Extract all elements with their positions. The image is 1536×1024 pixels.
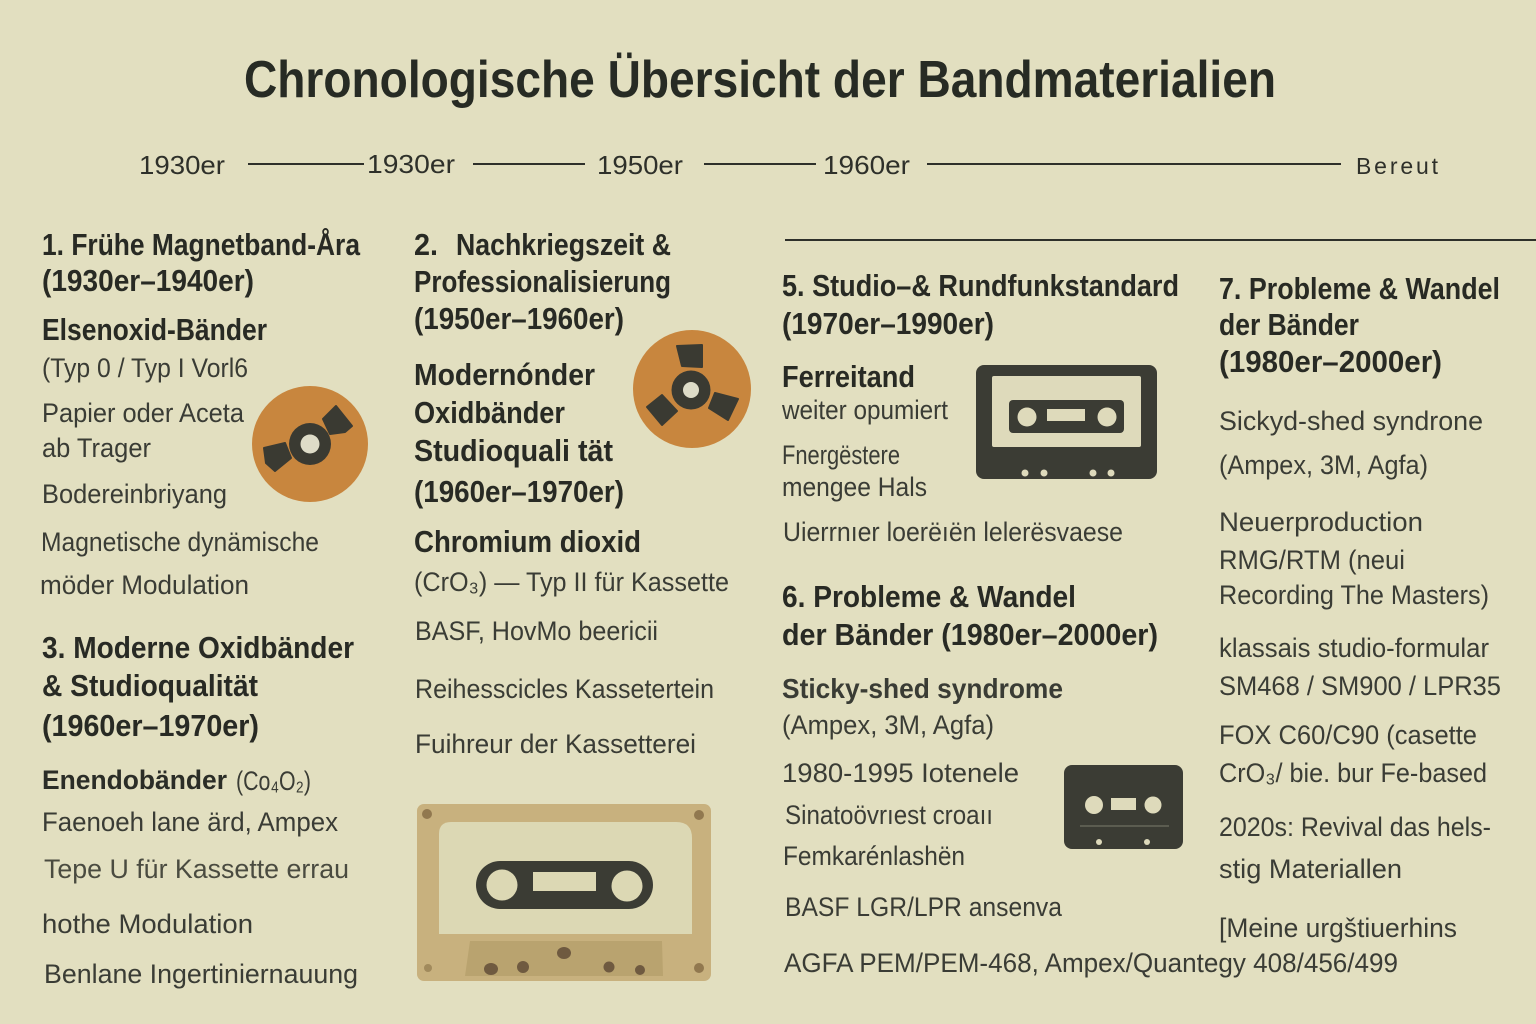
heading: section 3: 3. Moderne Oxidbänder: [42, 630, 354, 665]
panel: section 2 post-war professionalisation: [414, 227, 729, 759]
panel: section 1 early magnetic tape era: [40, 227, 361, 600]
heading: section 1: (1930er–1940er): [42, 263, 254, 298]
text block: section 7 details: stig Materiallen: [1219, 854, 1402, 884]
subheading: modern oxide tapes: Oxidbänder: [414, 395, 565, 430]
text block: section 6 details: BASF LGR/LPR ansenva: [785, 892, 1063, 922]
text block: section 6 details: Sinatoövrıest croaıı: [785, 800, 993, 830]
heading: section 1: [42, 227, 361, 298]
text block: section 2 details: Reihesscicles Kassetertein: [415, 674, 714, 704]
heading: section 1: 1. Frühe Magnetband-Åra: [42, 227, 361, 262]
subheading: iron oxide tapes: Elsenoxid-Bänder: [42, 312, 267, 347]
text block: section 5 details: Uierrnıer loerëıën lelerësvaese: [783, 517, 1123, 547]
text block: section 3 details: Faenoeh lane ärd, Ampex: [42, 807, 338, 837]
panel: section 5 studio and broadcast standard: [781, 268, 1179, 547]
text block: section 7 details: (Ampex, 3M, Agfa): [1219, 450, 1428, 480]
heading: section 7: (1980er–2000er): [1219, 344, 1442, 379]
heading: section 6: der Bänder (1980er–2000er): [782, 617, 1158, 652]
icon: orange tape reel right: [633, 330, 751, 448]
subheading: sticky-shed syndrome: Sticky-shed syndrome: [782, 673, 1063, 704]
heading: section 5: (1970er–1990er): [782, 306, 994, 341]
text block: section 3 details: hothe Modulation: [42, 909, 253, 939]
subheading: chromium dioxide: Chromium dioxid: [414, 524, 641, 559]
text block: section 7 details: RMG/RTM (neui: [1219, 545, 1405, 575]
subheading: modern oxide tapes: [414, 357, 624, 509]
timeline: 1930er: [139, 150, 225, 180]
heading: section 2: Professionalisierung: [414, 264, 671, 299]
text block: section 3 details: Tepe U für Kassette errau: [44, 854, 349, 884]
title: Chronologische Übersicht der Bandmaterialien: [244, 51, 1276, 109]
text block: section 6 details: [782, 710, 1398, 978]
text block: section 1 details: (Typ 0 / Typ I Vorl6: [42, 353, 248, 383]
panel: section 7 problems and change of tapes: [1219, 271, 1501, 943]
icon: beige cassette: [417, 804, 711, 981]
text block: section 3 details: [42, 765, 358, 989]
heading: section 3: & Studioqualität: [42, 668, 258, 703]
text block: section 3 details: Benlane Ingertiniernauung: [44, 959, 358, 989]
heading: section 7: [1219, 271, 1500, 379]
heading: section 6: [782, 579, 1158, 652]
text block: section 1 details: möder Modulation: [40, 570, 249, 600]
text block: section 5 details: mengee Hals: [782, 472, 927, 502]
text block: section 6 details: 1980-1995 Iotenele: [782, 758, 1019, 788]
heading: section 6: 6. Probleme & Wandel: [782, 579, 1076, 614]
heading: section 3: (1960er–1970er): [42, 708, 259, 743]
text block: section 2 details: Fuihreur der Kassetterei: [415, 729, 696, 759]
text block: section 5 details: weiter opumiert: [781, 395, 948, 425]
heading: section 2: 2.: [414, 227, 438, 262]
panel: section 6 problems and change: [782, 579, 1398, 978]
heading: section 5: 5. Studio–& Rundfunkstandard: [782, 268, 1179, 303]
text block: section 1 details: [40, 353, 319, 600]
text block: section 6 details: (Ampex, 3M, Agfa): [782, 710, 994, 740]
timeline: Bereut: [1356, 153, 1439, 179]
timeline: 1950er: [597, 150, 683, 180]
text block: section 7 details: [1219, 406, 1501, 943]
text block: section 5 details: Fnergëstere: [782, 440, 900, 470]
timeline: [139, 149, 1439, 180]
text block: section 5 details: [781, 395, 1123, 547]
text block: section 3 details: (Co₄O₂): [236, 766, 311, 796]
text block: section 1 details: Papier oder Aceta: [42, 398, 245, 428]
text block: section 7 details: [Meine urgštiuerhins: [1219, 913, 1457, 943]
heading: section 3: [42, 630, 354, 743]
text block: section 7 details: CrO₃/ bie. bur Fe-based: [1219, 758, 1487, 788]
panel: section 3 modern oxide tapes: [42, 630, 358, 989]
text block: section 7 details: Sickyd-shed syndrone: [1219, 406, 1483, 436]
text block: section 2 details: BASF, HovMo beericii: [415, 616, 658, 646]
subheading: modern oxide tapes: (1960er–1970er): [414, 474, 624, 509]
text block: section 1 details: Bodereinbriyang: [42, 479, 227, 509]
timeline: 1960er: [823, 150, 910, 180]
text block: section 1 details: Magnetische dynämische: [41, 527, 319, 557]
text block: section 2 details: [414, 567, 729, 759]
heading: section 2: (1950er–1960er): [414, 301, 624, 336]
heading: section 2: [414, 227, 671, 336]
icon: dark cassette top: [976, 365, 1157, 479]
subheading: ferric tape: Ferreitand: [782, 359, 915, 394]
icon: orange tape reel left: [252, 386, 368, 502]
text block: section 7 details: SM468 / SM900 / LPR35: [1219, 671, 1501, 701]
subheading: modern oxide tapes: Studioquali tät: [414, 433, 613, 468]
timeline: 1930er: [367, 149, 455, 179]
text block: section 7 details: 2020s: Revival das hels-: [1219, 812, 1491, 842]
text block: section 7 details: Neuerproduction: [1219, 507, 1423, 537]
text block: section 1 details: ab Trager: [42, 433, 151, 463]
text block: section 6 details: AGFA PEM/PEM-468, Ampex/Quantegy 408/456/499: [784, 948, 1398, 978]
text block: section 7 details: Recording The Masters): [1219, 580, 1489, 610]
heading: section 5: [782, 268, 1179, 341]
icon: small dark cassette: [1064, 765, 1183, 849]
text block: section 7 details: klassais studio-formular: [1219, 633, 1489, 663]
text block: section 2 details: (CrO₃) — Typ II für Kassette: [414, 567, 729, 597]
text block: section 7 details: FOX C60/C90 (casette: [1219, 720, 1477, 750]
heading: section 7: 7. Probleme & Wandel: [1219, 271, 1500, 306]
subheading: modern oxide tapes: Modernónder: [414, 357, 595, 392]
heading: section 2: Nachkriegszeit &: [456, 227, 671, 262]
heading: section 7: der Bänder: [1219, 307, 1359, 342]
text block: section 3 details: Enendobänder: [42, 765, 227, 795]
text block: section 6 details: Femkarénlashën: [783, 841, 965, 871]
